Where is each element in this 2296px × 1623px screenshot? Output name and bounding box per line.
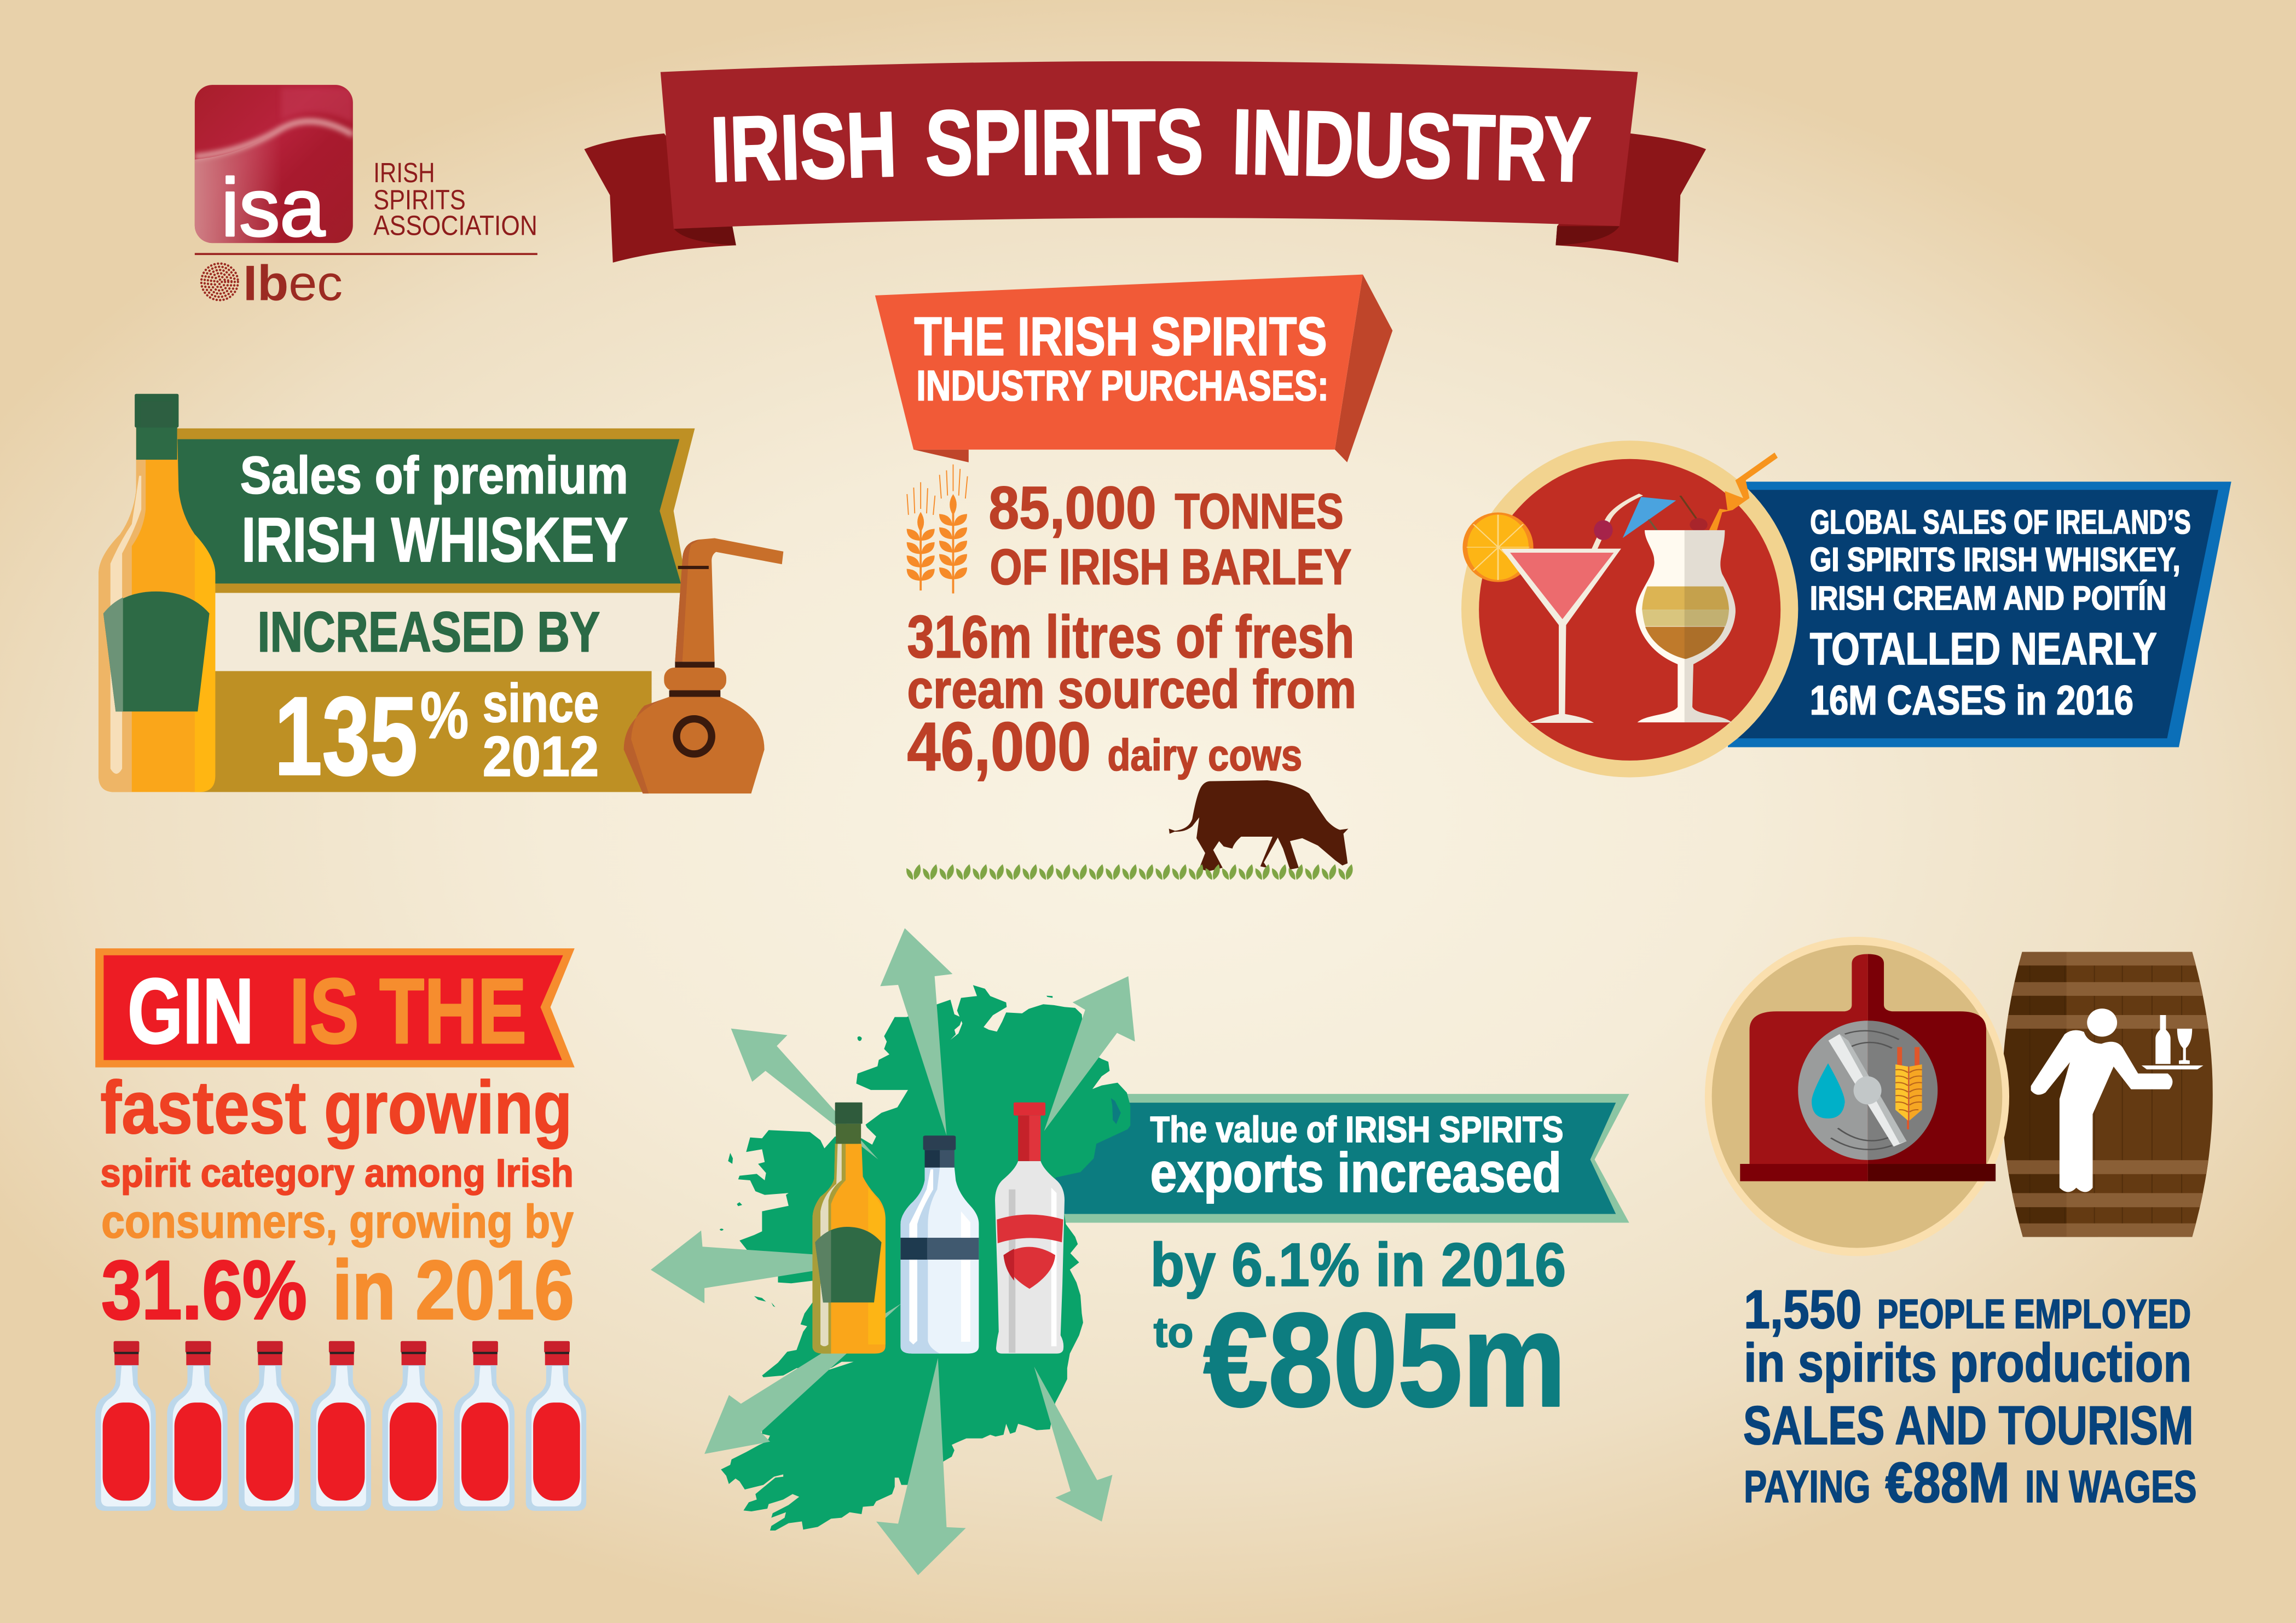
panel: gin — [95, 948, 586, 1511]
panel: industry purchases — [875, 275, 1392, 880]
panel: gin: 31.6% — [101, 1244, 307, 1337]
panel: exports — [651, 928, 1629, 1575]
panel: gin: consumers, growing by — [101, 1196, 574, 1248]
umbrella — [1623, 497, 1676, 538]
title text: INDUSTRY — [1231, 90, 1592, 201]
whiskey bottle on map — [812, 1103, 886, 1354]
purchases text — [907, 474, 1356, 785]
association name: ASSOCIATION — [373, 210, 537, 241]
whiskey bottle — [99, 394, 215, 792]
waiter figure — [2031, 1008, 2204, 1192]
panel: premium Irish whiskey: 2012 — [483, 725, 599, 789]
wheat — [1895, 1047, 1922, 1129]
ribbon tails — [585, 134, 1706, 263]
icon: cocktails — [1465, 453, 1778, 723]
employment text: in spirits production — [1744, 1332, 2191, 1393]
zigzag straw — [1709, 453, 1778, 530]
logo: Irish Spirits Association and Ibec — [195, 85, 537, 311]
panel: premium Irish whiskey: 135 — [274, 674, 418, 798]
title text: IRISH — [709, 92, 898, 201]
purchases text: dairy cows — [1107, 731, 1302, 780]
employment text: PAYING — [1744, 1461, 1871, 1512]
global sales text: TOTALLED NEARLY — [1810, 623, 2157, 674]
global sales text: 16M CASES in 2016 — [1810, 677, 2133, 723]
ribbon main band — [661, 61, 1638, 229]
Ibec dot emblem — [201, 264, 238, 300]
export arrows — [651, 928, 1135, 1575]
purchases text: cream sourced from — [907, 658, 1356, 719]
gin ribbon outer — [95, 948, 575, 1068]
panel: gin: in 2016 — [332, 1244, 574, 1337]
map of Ireland — [720, 985, 1130, 1531]
global sales text: GI SPIRITS IRISH WHISKEY, — [1810, 541, 2181, 578]
purchases text: TONNES — [1175, 484, 1344, 539]
panel: gin: spirit category among Irish — [100, 1152, 574, 1196]
still window — [1798, 1021, 1868, 1160]
title ribbon — [585, 61, 1706, 263]
straw — [1594, 495, 1641, 550]
purchases text: 316m litres of fresh — [907, 604, 1355, 670]
association name — [373, 157, 537, 241]
hurricane glass — [1636, 530, 1736, 722]
panel: premium Irish whiskey: INCREASED BY — [257, 601, 600, 664]
gold ribbon — [161, 428, 695, 593]
orange slice — [1465, 513, 1531, 581]
cream band — [190, 593, 681, 671]
employment text: 1,550 — [1744, 1279, 1861, 1340]
association name: SPIRITS — [373, 184, 466, 216]
exports text: The value of IRISH SPIRITS — [1150, 1109, 1564, 1150]
banner heading: THE IRISH SPIRITS — [914, 306, 1327, 367]
barrel — [1979, 950, 2224, 1239]
global sales text — [1810, 503, 2191, 723]
logo wave highlight — [195, 88, 353, 243]
panel: global sales — [1461, 440, 2231, 778]
bottle neck and cap — [136, 426, 177, 460]
clear bottle on map — [900, 1135, 979, 1354]
panel: exports: exports increased — [1150, 1141, 1561, 1204]
gold band — [190, 671, 652, 792]
cherry — [1594, 520, 1613, 540]
bottles on map — [812, 1103, 1065, 1354]
panel: premium Irish whiskey: since — [483, 673, 599, 733]
pot still icon — [1740, 954, 1996, 1181]
purchases text: 85,000 — [988, 474, 1156, 541]
gin ribbon inner — [103, 955, 563, 1060]
circle badge — [1705, 937, 2009, 1256]
navy panel inner — [1735, 490, 2218, 738]
title text: SPIRITS — [925, 90, 1204, 194]
teal ribbon outer — [1054, 1094, 1629, 1223]
panel: premium Irish whiskey — [99, 394, 783, 798]
orange banner — [875, 275, 1392, 462]
martini glass — [1501, 549, 1621, 723]
purchases text: 46,000 — [907, 708, 1091, 785]
teal ribbon inner — [1054, 1103, 1616, 1214]
water drop — [1812, 1063, 1845, 1118]
grass strip — [906, 864, 1355, 880]
red-label bottle on map — [995, 1103, 1065, 1354]
global sales text: IRISH CREAM AND POITÍN — [1810, 579, 2166, 617]
panel: premium Irish whiskey: IRISH WHISKEY — [241, 505, 628, 575]
panel: employment — [1705, 937, 2224, 1515]
icon: barley — [907, 465, 968, 594]
icon: cow — [1169, 780, 1348, 871]
panel: premium Irish whiskey: % — [420, 678, 469, 752]
employment text — [1743, 1279, 2197, 1515]
Strangford Lough — [1111, 1098, 1121, 1124]
gin text: fastest growing — [100, 1065, 572, 1149]
circle badge — [1461, 440, 1798, 778]
logo badge — [195, 85, 353, 243]
gin heading: GIN — [128, 959, 254, 1063]
green ribbon — [161, 439, 681, 583]
panel: gin: IS THE — [290, 959, 527, 1063]
panel: exports: €805m — [1204, 1285, 1566, 1434]
whiskey text: Sales of premium — [240, 447, 628, 505]
blade and hub — [1829, 1034, 1907, 1146]
panel: exports: to — [1154, 1309, 1193, 1356]
title text — [709, 90, 1592, 201]
panel: industry purchases: INDUSTRY PURCHASES: — [916, 363, 1329, 410]
blue panel outer — [1728, 482, 2231, 747]
employment text: €88M — [1886, 1451, 2010, 1515]
row of gin bottles — [95, 1341, 586, 1511]
panel: exports: by 6.1% in 2016 — [1150, 1230, 1566, 1299]
copper still — [624, 538, 783, 793]
map islands — [720, 996, 1052, 1307]
ribbon folds — [674, 226, 1620, 245]
employment text: PEOPLE EMPLOYED — [1877, 1291, 2191, 1337]
employment text: IN WAGES — [2025, 1461, 2197, 1512]
bottle label — [103, 592, 210, 711]
purchases text: OF IRISH BARLEY — [990, 538, 1351, 595]
Ibec wordmark: Ibec — [243, 256, 343, 311]
association name: IRISH — [373, 157, 435, 188]
logo letters isa: isa — [221, 161, 326, 253]
